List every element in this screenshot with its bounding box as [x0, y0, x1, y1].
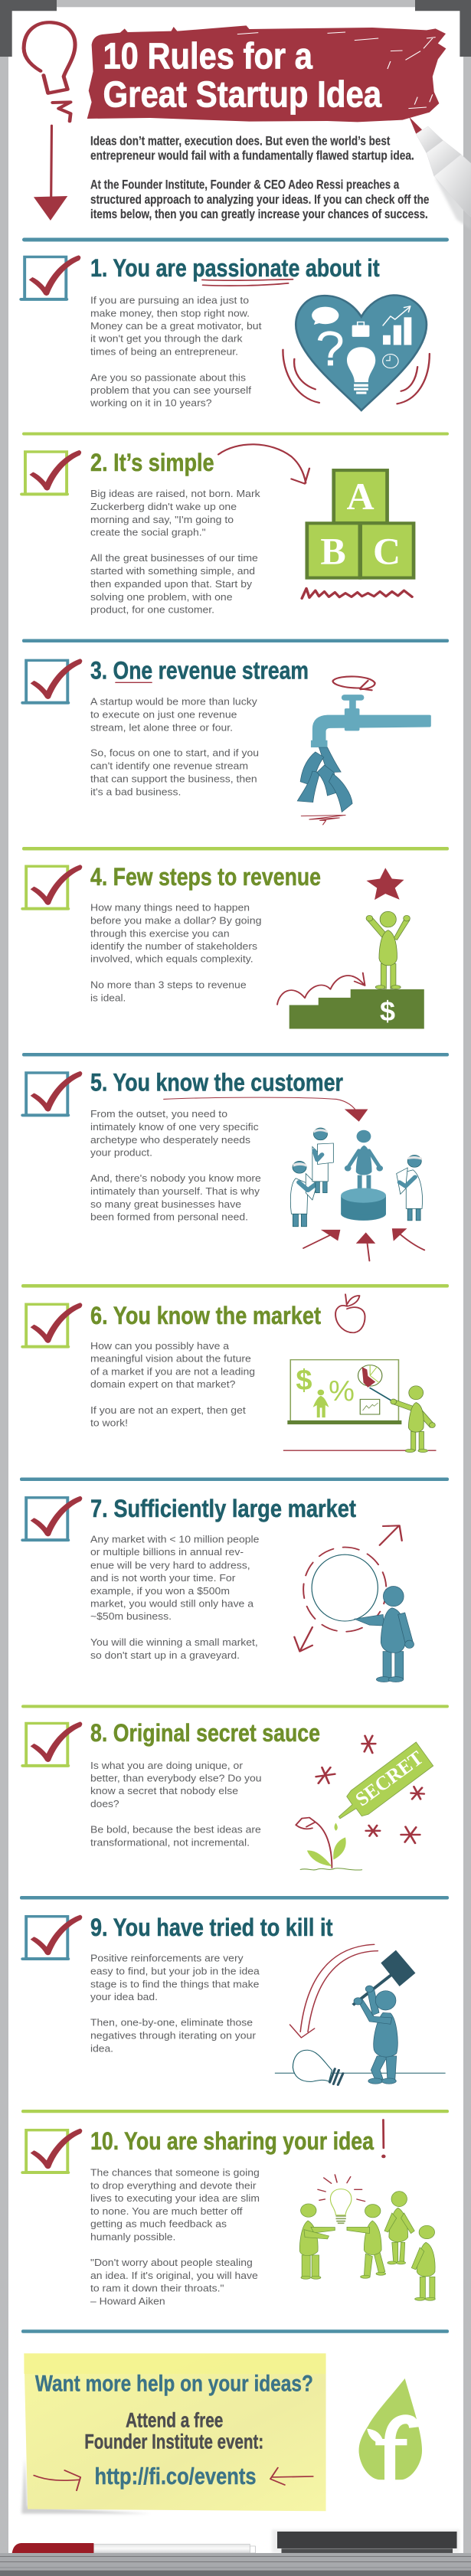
icon: teacher at board with apple — [283, 1294, 436, 1453]
icon: faucet pouring money — [116, 676, 431, 825]
text 1: problem that you can see yourself — [90, 384, 251, 396]
whiteboard tray — [0, 2553, 471, 2576]
text 7: or multiple billions in annual rev- — [90, 1546, 244, 1558]
text 9: negatives through iterating on your — [90, 2030, 257, 2042]
text 4: is ideal. — [90, 992, 126, 1003]
text 1: Money can be a great motivator, but — [90, 320, 262, 332]
text 2: Big ideas are raised, not born. Mark — [90, 488, 260, 499]
rule 3: one revenue stream — [22, 657, 431, 825]
text 3: it's a bad business. — [90, 786, 181, 797]
text 2: then expanded upon that. Start by — [90, 578, 253, 590]
text 5: your product. — [90, 1147, 152, 1158]
header icon: light bulb and arrow — [24, 22, 75, 221]
text 2: All the great businesses of our time — [90, 552, 258, 564]
text 1: make money, then stop right now. — [90, 307, 250, 319]
marker and eraser on tray — [12, 2529, 460, 2553]
text 8: Be bold, because the best ideas are — [90, 1824, 261, 1835]
text 6: domain expert on that market? — [90, 1378, 235, 1390]
text 8: Is what you are doing unique, or — [90, 1760, 244, 1771]
text 7: enue will be very hard to address, — [90, 1559, 250, 1571]
text 5: intimately know of one very specific — [90, 1121, 259, 1133]
text 2: solving one problem, with one — [90, 591, 233, 603]
text 1: If you are pursuing an idea just to — [90, 294, 249, 306]
rule 5: know the customer — [22, 1068, 424, 1261]
text 9: idea. — [90, 2042, 113, 2054]
text 5: been formed from personal need. — [90, 1211, 248, 1222]
text 4: before you make a dollar? By going — [90, 914, 262, 926]
text 7: example, if you won a $500m — [90, 1585, 230, 1597]
text 5: From the outset, you need to — [90, 1108, 227, 1120]
rule 1: passionate — [21, 254, 430, 410]
text 3 — [90, 696, 259, 797]
text 2: started with something simple, and — [90, 565, 255, 577]
rule 4: few steps to revenue — [22, 863, 424, 1029]
text 1 — [90, 294, 262, 409]
text 2: morning and say, "I'm going to — [90, 514, 234, 525]
text 10 — [90, 2166, 260, 2307]
text 5: so many great businesses have — [90, 1198, 241, 1210]
text 10: getting as much feedback as — [90, 2218, 227, 2230]
text 4: involved, which equals complexity. — [90, 953, 253, 965]
checkbox 2 — [21, 450, 81, 494]
icon: teacher at board with apple: % — [329, 1375, 355, 1407]
text 8: transformational, not incremental. — [90, 1836, 250, 1848]
text 3: can't identify one revenue stream — [90, 760, 248, 772]
text 10: an idea. If it's original, you will have — [90, 2270, 258, 2281]
heading 9: 9. You have tried to kill it — [90, 1914, 333, 1941]
text 6 — [90, 1340, 255, 1428]
text 3: A startup would be more than lucky — [90, 696, 257, 708]
text 5: And, there's nobody you know more — [90, 1172, 261, 1184]
text 3: to execute on just one revenue — [90, 709, 237, 720]
icon: ABC blocks with arrow — [218, 444, 414, 598]
text 9: stage is to find the things that make — [90, 1978, 259, 1989]
text 9: easy to find, but your job in the idea — [90, 1965, 260, 1976]
heading 3: 3. One revenue stream — [90, 657, 309, 685]
text 9: Then, one-by-one, eliminate those — [90, 2017, 253, 2028]
text 5 — [90, 1108, 261, 1222]
text 9 — [90, 1953, 260, 2054]
checkbox 6 — [22, 1303, 82, 1347]
heading 2: 2. It’s simple — [90, 449, 214, 476]
text 5: intimately than yourself. That is why — [90, 1185, 260, 1197]
heading 8: 8. Original secret sauce — [90, 1719, 320, 1747]
text 3: that can support the business, then — [90, 773, 257, 784]
rule 10: sharing your idea — [22, 2120, 435, 2307]
text 10: "Don't worry about people stealing — [90, 2257, 253, 2268]
text 6: meaningful vision about the future — [90, 1352, 251, 1364]
text 7: market, you would still only have a — [90, 1598, 254, 1610]
text 6: to work! — [90, 1417, 128, 1428]
heading 7: 7. Sufficiently large market — [90, 1495, 356, 1522]
icon: teacher at board with apple: $ — [296, 1365, 312, 1397]
callout text: Attend a free — [126, 2408, 223, 2431]
text 2: product, for one customer. — [90, 603, 214, 615]
text 4: identify the number of stakeholders — [90, 940, 258, 952]
text 8: does? — [90, 1798, 119, 1809]
text 9: your idea bad. — [90, 1991, 158, 2002]
checkbox 10 — [22, 2129, 82, 2172]
callout: sticky note — [21, 2353, 326, 2514]
text 2: create the social graph." — [90, 526, 206, 538]
checkbox 4 — [22, 865, 82, 909]
rule 9: tried to kill it — [22, 1914, 446, 2085]
icon: secret sauce tube and plant: SECRET — [352, 1747, 427, 1810]
heading 4: 4. Few steps to revenue — [90, 863, 321, 891]
rule 8: original secret sauce — [22, 1719, 433, 1870]
text 8: better, than everybody else? Do you — [90, 1773, 262, 1784]
callout heading: Want more help on your ideas? — [35, 2372, 313, 2397]
icon: heart with business symbols — [202, 280, 430, 410]
checkbox 8 — [22, 1721, 82, 1766]
rule 6: know the market — [22, 1294, 436, 1453]
text 3: stream, let alone three or four. — [90, 721, 233, 733]
icon: person holding expanding circle — [294, 1525, 414, 1682]
title text: 10 Rules for a — [103, 36, 312, 77]
text 4 — [90, 902, 262, 1003]
text 10: humanly possible. — [90, 2231, 175, 2243]
callout: sticky note: Founder Institute event: — [84, 2430, 263, 2453]
icon: person on steps reaching star: $ — [380, 995, 395, 1027]
text 10: to drop everything and devote their — [90, 2179, 257, 2191]
heading 10: 10. You are sharing your idea — [90, 2127, 374, 2155]
icon: secret sauce tube and plant — [296, 1736, 433, 1870]
text 4: through this exercise you can — [90, 927, 230, 939]
icon: group of people sharing an idea — [299, 2120, 435, 2300]
icon: person smashing bulb with hammer — [275, 1944, 446, 2085]
heading 5: 5. You know the customer — [90, 1068, 343, 1096]
text 7: and is not worth your time. For — [90, 1572, 236, 1584]
text 3: So, focus on one to start, and if you — [90, 747, 259, 759]
text 1: Are you so passionate about this — [90, 371, 247, 383]
icon: ABC blocks with arrow: A — [347, 475, 375, 518]
text 9: Positive reinforcements are very — [90, 1953, 244, 1964]
icon: customer on pedestal studied by researchers — [164, 1097, 424, 1261]
text 10: to ram it down their throats." — [90, 2283, 224, 2294]
logo: Founder Institute leaf — [359, 2378, 422, 2481]
text 10: – Howard Aiken — [90, 2296, 165, 2307]
text 6: of a market if you are not a leading — [90, 1365, 255, 1377]
text 10: The chances that someone is going — [90, 2166, 260, 2178]
text 1: working on it in 10 years? — [90, 397, 211, 409]
text 6: If you are not an expert, then get — [90, 1404, 246, 1416]
checkbox 3 — [22, 659, 82, 703]
checkbox 7 — [22, 1496, 82, 1540]
text 6: How can you possibly have a — [90, 1340, 230, 1352]
text 7: ~$50m business. — [90, 1610, 172, 1622]
rule 7: sufficiently large market — [22, 1495, 414, 1682]
text 2: Zuckerberg didn't wake up one — [90, 501, 237, 512]
checkbox 9 — [22, 1915, 82, 1959]
title banner: Great Startup Idea — [103, 74, 381, 115]
text 1: it won't get you through the dark — [90, 333, 243, 345]
text 4: How many things need to happen — [90, 902, 250, 913]
title banner — [87, 25, 446, 122]
text 10: to none. You are much better off — [90, 2205, 243, 2217]
text 7: Any market with < 10 million people — [90, 1534, 259, 1545]
text 4: No more than 3 steps to revenue — [90, 979, 247, 990]
icon: person on steps reaching star — [277, 868, 424, 1029]
intro text: Ideas don’t matter, execution does. But even the world’s best — [90, 133, 391, 148]
icon: ABC blocks with arrow: C — [373, 530, 401, 573]
icon: marker pen — [409, 117, 471, 230]
callout link: http://fi.co/events — [95, 2463, 256, 2489]
text 7 — [90, 1534, 259, 1661]
intro text — [90, 133, 429, 221]
text 7: so don't start up in a graveyard. — [90, 1649, 240, 1661]
rule 2: simple — [21, 444, 414, 615]
text 10: lives to executing your idea are slim — [90, 2192, 260, 2204]
text 8: know a secret that nobody else — [90, 1785, 238, 1796]
text 7: You will die winning a small market, — [90, 1636, 258, 1648]
text 8 — [90, 1760, 262, 1848]
icon: ABC blocks with arrow: B — [320, 530, 346, 573]
text 2 — [90, 488, 260, 615]
heading 1: 1. You are passionate about it — [90, 254, 380, 282]
checkbox 1 — [21, 255, 80, 299]
heading 6: 6. You know the market — [90, 1302, 321, 1329]
text 1: times of being an entrepreneur. — [90, 346, 238, 358]
text 5: archetype who desperately needs — [90, 1134, 251, 1146]
checkbox 5 — [22, 1071, 82, 1115]
